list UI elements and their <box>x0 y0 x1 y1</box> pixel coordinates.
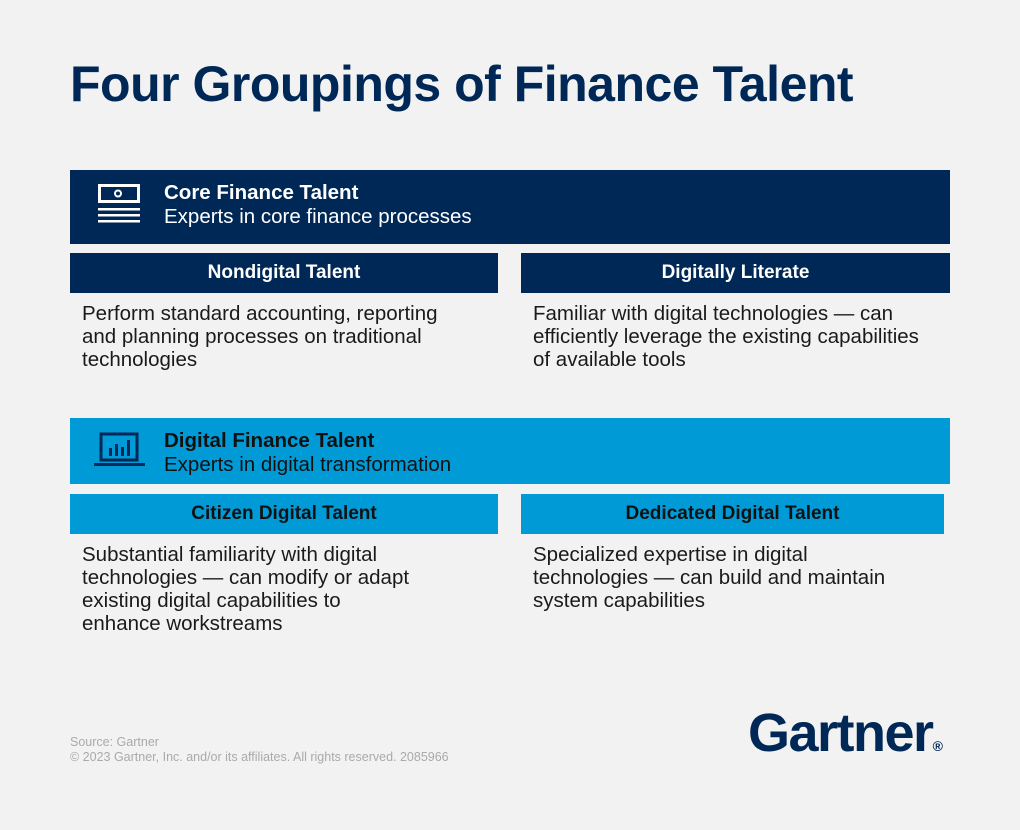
footer source: Source: Gartner <box>70 735 159 749</box>
heading text <box>164 181 472 228</box>
sub heading: digitally literate: Digitally Literate <box>662 262 809 283</box>
sub heading: nondigital <box>70 253 498 293</box>
sub heading: citizen: Citizen Digital Talent <box>191 503 377 524</box>
banner: digital finance talent <box>70 418 950 484</box>
footer source: © 2023 Gartner, Inc. and/or its affiliates. All rights reserved. 2085966 <box>70 750 449 764</box>
heading text: Experts in digital transformation <box>164 453 451 476</box>
title: Four Groupings of Finance Talent <box>70 56 853 112</box>
heading text <box>164 429 451 476</box>
banner: core finance talent <box>70 170 950 244</box>
text: citizen: Substantial familiarity with digital technologies — can modify or adapt existing digital capabilities to enhance workstreams <box>82 543 409 635</box>
heading text: Digital Finance Talent <box>164 429 374 452</box>
sub heading: dedicated: Dedicated Digital Talent <box>626 503 839 524</box>
sub heading: dedicated <box>521 494 944 534</box>
logo: Gartner: Gartner® <box>748 703 943 763</box>
heading text: Experts in core finance processes <box>164 205 472 228</box>
sub heading: digitally literate <box>521 253 950 293</box>
heading text: Core Finance Talent <box>164 181 358 204</box>
text: nondigital: Perform standard accounting, reporting and planning processes on traditional technologies <box>82 302 438 371</box>
text: dedicated: Specialized expertise in digital technologies — can build and maintain system capabilities <box>533 543 885 612</box>
icon: money <box>98 184 140 222</box>
sub heading: nondigital: Nondigital Talent <box>208 262 360 283</box>
footer source <box>70 735 449 764</box>
icon: laptop chart <box>94 432 145 466</box>
text: digitally literate: Familiar with digital technologies — can efficiently leverage the existing capabilities of available tools <box>533 302 919 371</box>
sub heading: citizen <box>70 494 498 534</box>
